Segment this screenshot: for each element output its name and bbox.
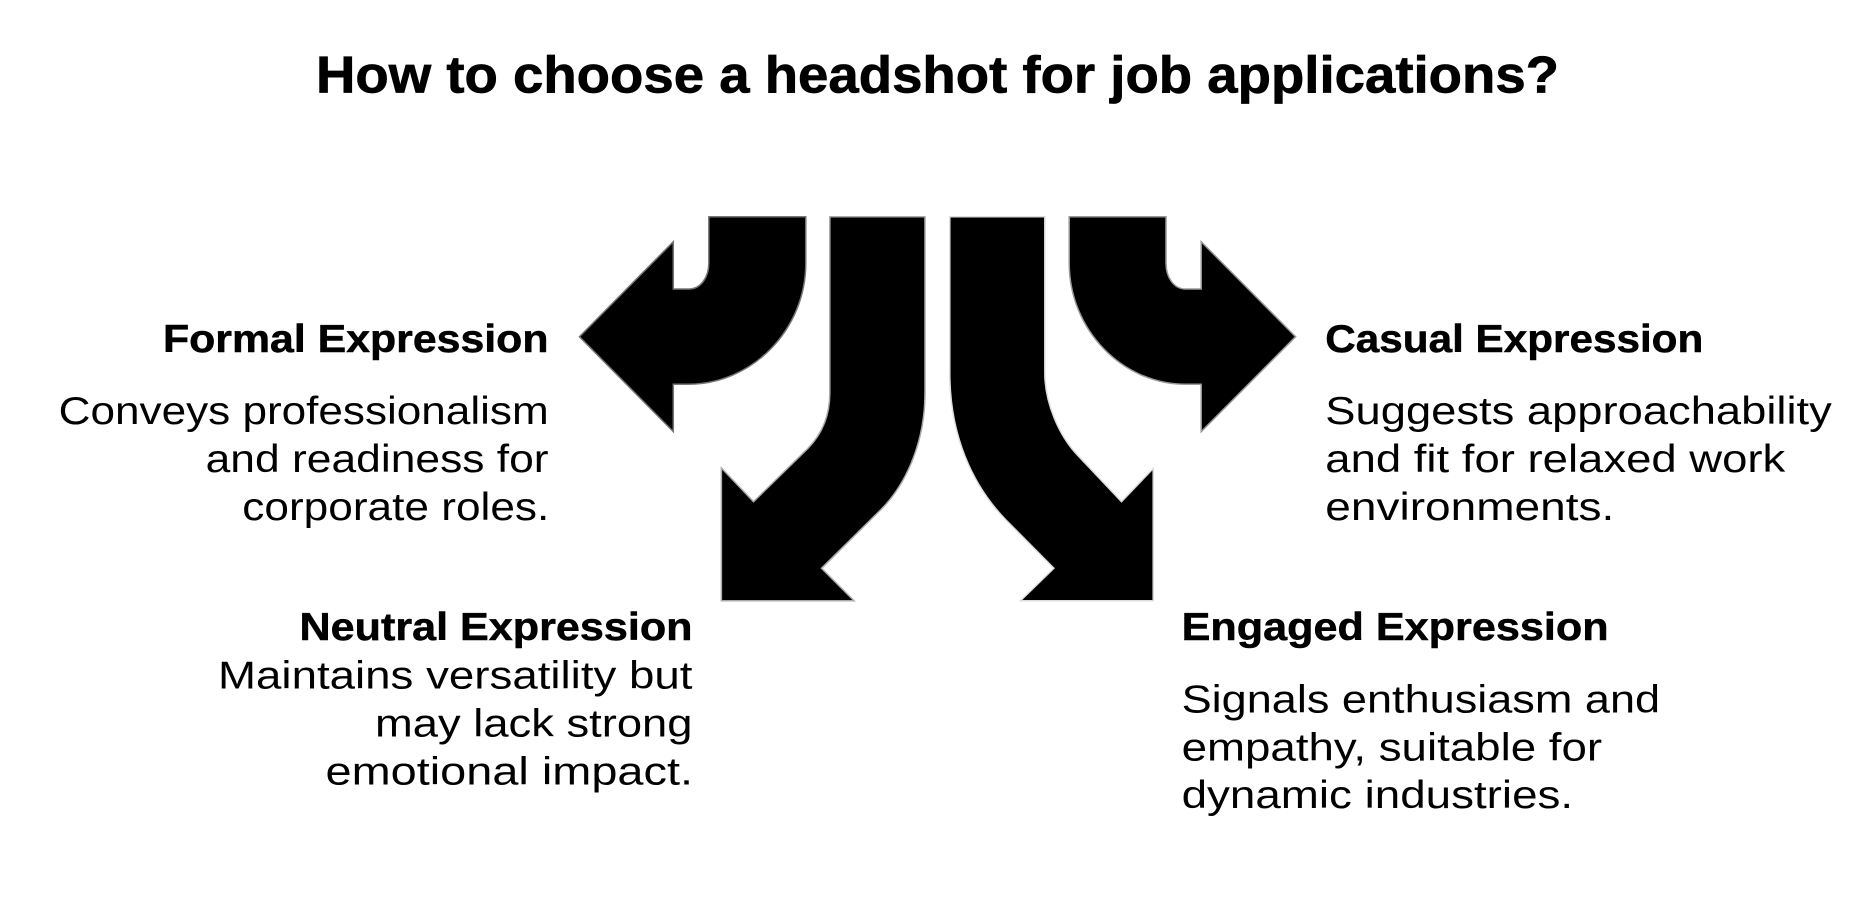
description: engaged expression	[1182, 678, 1660, 817]
text block: neutral expression	[218, 606, 693, 794]
text block: engaged expression	[1182, 606, 1660, 817]
description: engaged expression: Signals enthusiasm and	[1182, 678, 1660, 722]
description: casual expression: Suggests approachability	[1325, 390, 1832, 433]
description: engaged expression: empathy, suitable for	[1182, 726, 1602, 770]
description: neutral expression	[218, 654, 693, 794]
description: formal expression: Conveys professionalism	[59, 390, 549, 433]
arrow: casual expression	[1069, 217, 1296, 432]
heading: engaged expression: Engaged Expression	[1182, 606, 1609, 649]
arrow: engaged expression	[950, 217, 1153, 601]
diagram: four diverging arrows	[579, 217, 1296, 601]
arrow: neutral expression	[721, 217, 925, 601]
description: formal expression: and readiness for	[206, 438, 549, 481]
title: How to choose a headshot for job applications?	[316, 46, 1559, 104]
heading: casual expression: Casual Expression	[1325, 318, 1703, 361]
description: casual expression: environments.	[1325, 486, 1614, 529]
description: neutral expression: emotional impact.	[326, 750, 693, 794]
text block: casual expression	[1325, 318, 1832, 529]
description: formal expression: corporate roles.	[242, 486, 549, 529]
description: neutral expression: Maintains versatility but	[218, 654, 693, 698]
description: formal expression	[59, 390, 549, 529]
heading: neutral expression: Neutral Expression	[300, 606, 692, 649]
description: neutral expression: may lack strong	[375, 703, 692, 746]
text block: formal expression	[59, 318, 549, 529]
description: casual expression	[1325, 390, 1832, 529]
description: casual expression: and fit for relaxed work	[1325, 438, 1786, 481]
arrow: formal expression	[579, 217, 806, 432]
heading: formal expression: Formal Expression	[163, 318, 548, 361]
description: engaged expression: dynamic industries.	[1182, 774, 1573, 817]
